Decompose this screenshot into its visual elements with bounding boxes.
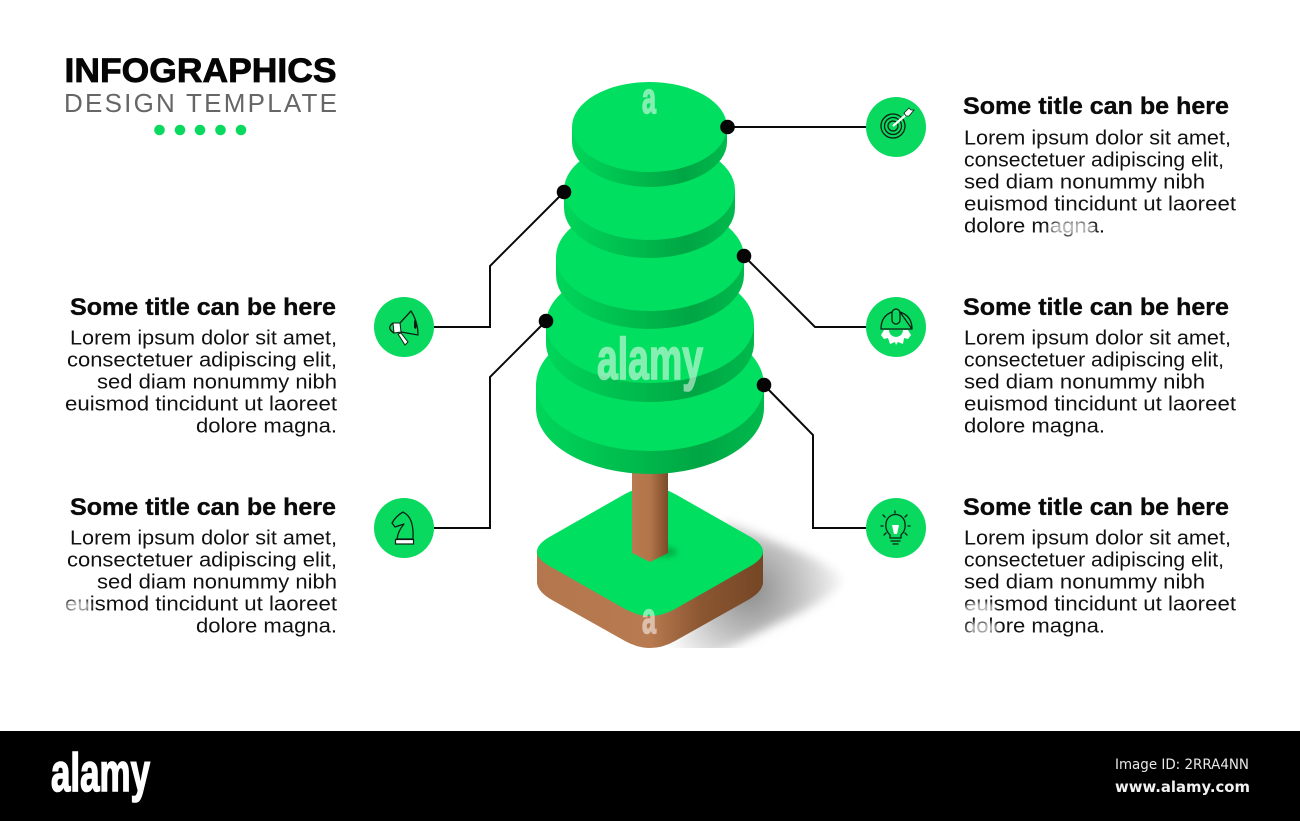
body: Lorem ipsum dolor sit amet, — [70, 528, 337, 550]
body: consectetuer adipiscing elit, — [67, 350, 337, 372]
body: Lorem ipsum dolor sit amet, — [964, 128, 1231, 150]
heading: infographics: INFOGRAPHICS — [64, 52, 336, 90]
title block — [64, 52, 337, 135]
body: sed diam nonummy nibh — [964, 372, 1205, 394]
trunk — [632, 470, 668, 562]
connector lines — [434, 127, 866, 528]
text block: top right — [963, 93, 1236, 238]
watermarks: a — [642, 594, 656, 643]
body: consectetuer adipiscing elit, — [964, 150, 1224, 172]
subheading: design template: DESIGN TEMPLATE — [64, 88, 337, 118]
title: Some title can be here — [963, 494, 1229, 521]
body: sed diam nonummy nibh — [964, 172, 1205, 194]
icon: megaphone — [374, 297, 434, 357]
body — [65, 528, 337, 638]
body — [964, 328, 1236, 438]
body: dolore magna. — [964, 616, 1105, 638]
body: euismod tincidunt ut laoreet — [65, 594, 337, 616]
isometric tree — [536, 82, 842, 662]
trunk contact shadow — [655, 547, 677, 557]
text block: middle right — [963, 294, 1236, 438]
watermarks: alamy — [597, 327, 703, 392]
foliage disc 5 — [536, 319, 764, 474]
body: dolore magna. — [196, 416, 337, 438]
foliage disc 3 — [556, 203, 744, 329]
watermarks — [597, 74, 703, 643]
text block: bottom left — [65, 494, 337, 638]
body: sed diam nonummy nibh — [964, 572, 1205, 594]
foliage disc 1 — [572, 82, 727, 187]
icon: chess knight — [374, 498, 434, 558]
title: Some title can be here — [963, 93, 1229, 120]
footer bar — [0, 731, 1300, 821]
body — [964, 128, 1236, 238]
body: euismod tincidunt ut laoreet — [65, 394, 337, 416]
text block: middle left — [65, 294, 337, 438]
base grass top — [537, 487, 763, 616]
connector dots — [539, 120, 771, 392]
body — [964, 528, 1236, 638]
body: Lorem ipsum dolor sit amet, — [964, 328, 1231, 350]
title: Some title can be here — [963, 294, 1229, 321]
watermarks: a — [642, 74, 656, 123]
image id: Image ID: 2RRA4NN — [1115, 757, 1249, 773]
foliage disc 2 — [564, 140, 735, 258]
body: dolore magna. — [964, 416, 1105, 438]
body: consectetuer adipiscing elit, — [964, 550, 1224, 572]
icon: helmet and gear — [866, 297, 926, 357]
body: dolore magna. — [196, 616, 337, 638]
body: consectetuer adipiscing elit, — [964, 350, 1224, 372]
body: dolore magna. — [964, 216, 1105, 238]
icon: light bulb — [866, 498, 926, 558]
body: consectetuer adipiscing elit, — [67, 550, 337, 572]
body: euismod tincidunt ut laoreet — [964, 594, 1236, 616]
title: Some title can be here — [70, 494, 336, 521]
body: Lorem ipsum dolor sit amet, — [70, 328, 337, 350]
body: euismod tincidunt ut laoreet — [964, 194, 1236, 216]
foliage disc 4 — [546, 265, 754, 402]
footer logo: alamy — [51, 743, 150, 803]
body: sed diam nonummy nibh — [97, 572, 337, 594]
icon: target — [866, 97, 926, 157]
body — [65, 328, 337, 438]
body: Lorem ipsum dolor sit amet, — [964, 528, 1231, 550]
title: Some title can be here — [70, 294, 336, 321]
title dots — [154, 125, 246, 135]
body: euismod tincidunt ut laoreet — [964, 394, 1236, 416]
website: www.alamy.com — [1115, 778, 1250, 796]
ground shadow — [676, 520, 840, 648]
text block: bottom right — [963, 494, 1236, 638]
body: sed diam nonummy nibh — [97, 372, 337, 394]
base soil side — [537, 551, 763, 648]
